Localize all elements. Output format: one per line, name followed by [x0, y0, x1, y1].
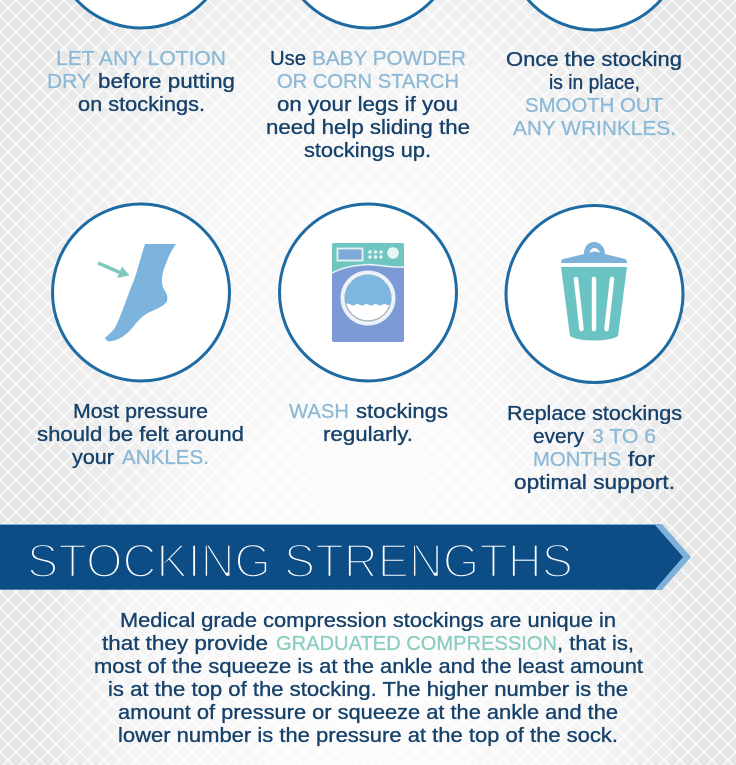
text: smooth out any wrinkles: Once the stocking [506, 49, 682, 71]
text: replace stockings: every [533, 426, 584, 448]
text: replace stockings: optimal support. [514, 472, 675, 494]
text: baby powder or corn starch: stockings up. [304, 140, 431, 162]
icon: foot with pressure arrow [52, 204, 230, 381]
text: stocking strengths explanation: GRADUATED COMPRESSION [276, 633, 557, 655]
text: pressure around ankles: your [72, 447, 114, 469]
text: smooth out any wrinkles: SMOOTH OUT [525, 95, 663, 117]
text: stocking strengths explanation: , that is, [557, 633, 634, 655]
text: pressure around ankles [37, 401, 244, 469]
icon: washing machine [280, 204, 456, 381]
text: stocking strengths explanation: Medical grade compression stockings are unique in [120, 610, 616, 632]
text: pressure around ankles: ANKLES. [122, 447, 209, 469]
heading banner: stocking strengths: STOCKING STRENGTHS [27, 534, 573, 587]
text: let any lotion dry: DRY [47, 71, 91, 93]
text: baby powder or corn starch: need help sliding the [266, 117, 470, 139]
text: replace stockings: 3 TO 6 [592, 426, 656, 448]
text: stocking strengths explanation: lower number is the pressure at the top of the sock. [118, 725, 618, 747]
text: wash stockings regularly: stockings [356, 401, 448, 423]
text: wash stockings regularly: regularly. [323, 424, 413, 446]
text: baby powder or corn starch [266, 48, 470, 162]
text: stocking strengths explanation: most of the squeeze is at the ankle and the least amount [94, 656, 643, 678]
text: let any lotion dry: before putting [98, 71, 235, 93]
text: replace stockings [507, 403, 682, 494]
text: smooth out any wrinkles: is in place, [549, 72, 640, 94]
text: replace stockings: Replace stockings [507, 403, 682, 425]
text: smooth out any wrinkles [506, 49, 682, 140]
icon: trash can [506, 206, 683, 382]
text: stocking strengths explanation [94, 610, 643, 747]
text: baby powder or corn starch: on your legs if you [277, 94, 458, 116]
heading banner: stocking strengths [0, 524, 691, 590]
text: let any lotion dry [47, 48, 235, 116]
text: pressure around ankles: Most pressure [73, 401, 208, 423]
text: stocking strengths explanation: is at the top of the stocking. The higher number is the [108, 679, 628, 701]
text: replace stockings: for [628, 449, 655, 471]
text: baby powder or corn starch: Use [270, 48, 306, 70]
text: let any lotion dry: on stockings. [78, 94, 205, 116]
text: stocking strengths explanation: that they provide [102, 633, 268, 655]
panel: top row circles [53, 0, 682, 30]
text: smooth out any wrinkles: ANY WRINKLES. [513, 118, 676, 140]
text: replace stockings: MONTHS [533, 449, 621, 471]
text: wash stockings regularly: WASH [289, 401, 349, 423]
text: pressure around ankles: should be felt around [37, 424, 244, 446]
text: stocking strengths explanation: amount of pressure or squeeze at the ankle and the [118, 702, 618, 724]
text: baby powder or corn starch: OR CORN STARCH [277, 71, 459, 93]
text: baby powder or corn starch: BABY POWDER [312, 48, 466, 70]
text: let any lotion dry: LET ANY LOTION [56, 48, 226, 70]
text: wash stockings regularly [289, 401, 448, 446]
